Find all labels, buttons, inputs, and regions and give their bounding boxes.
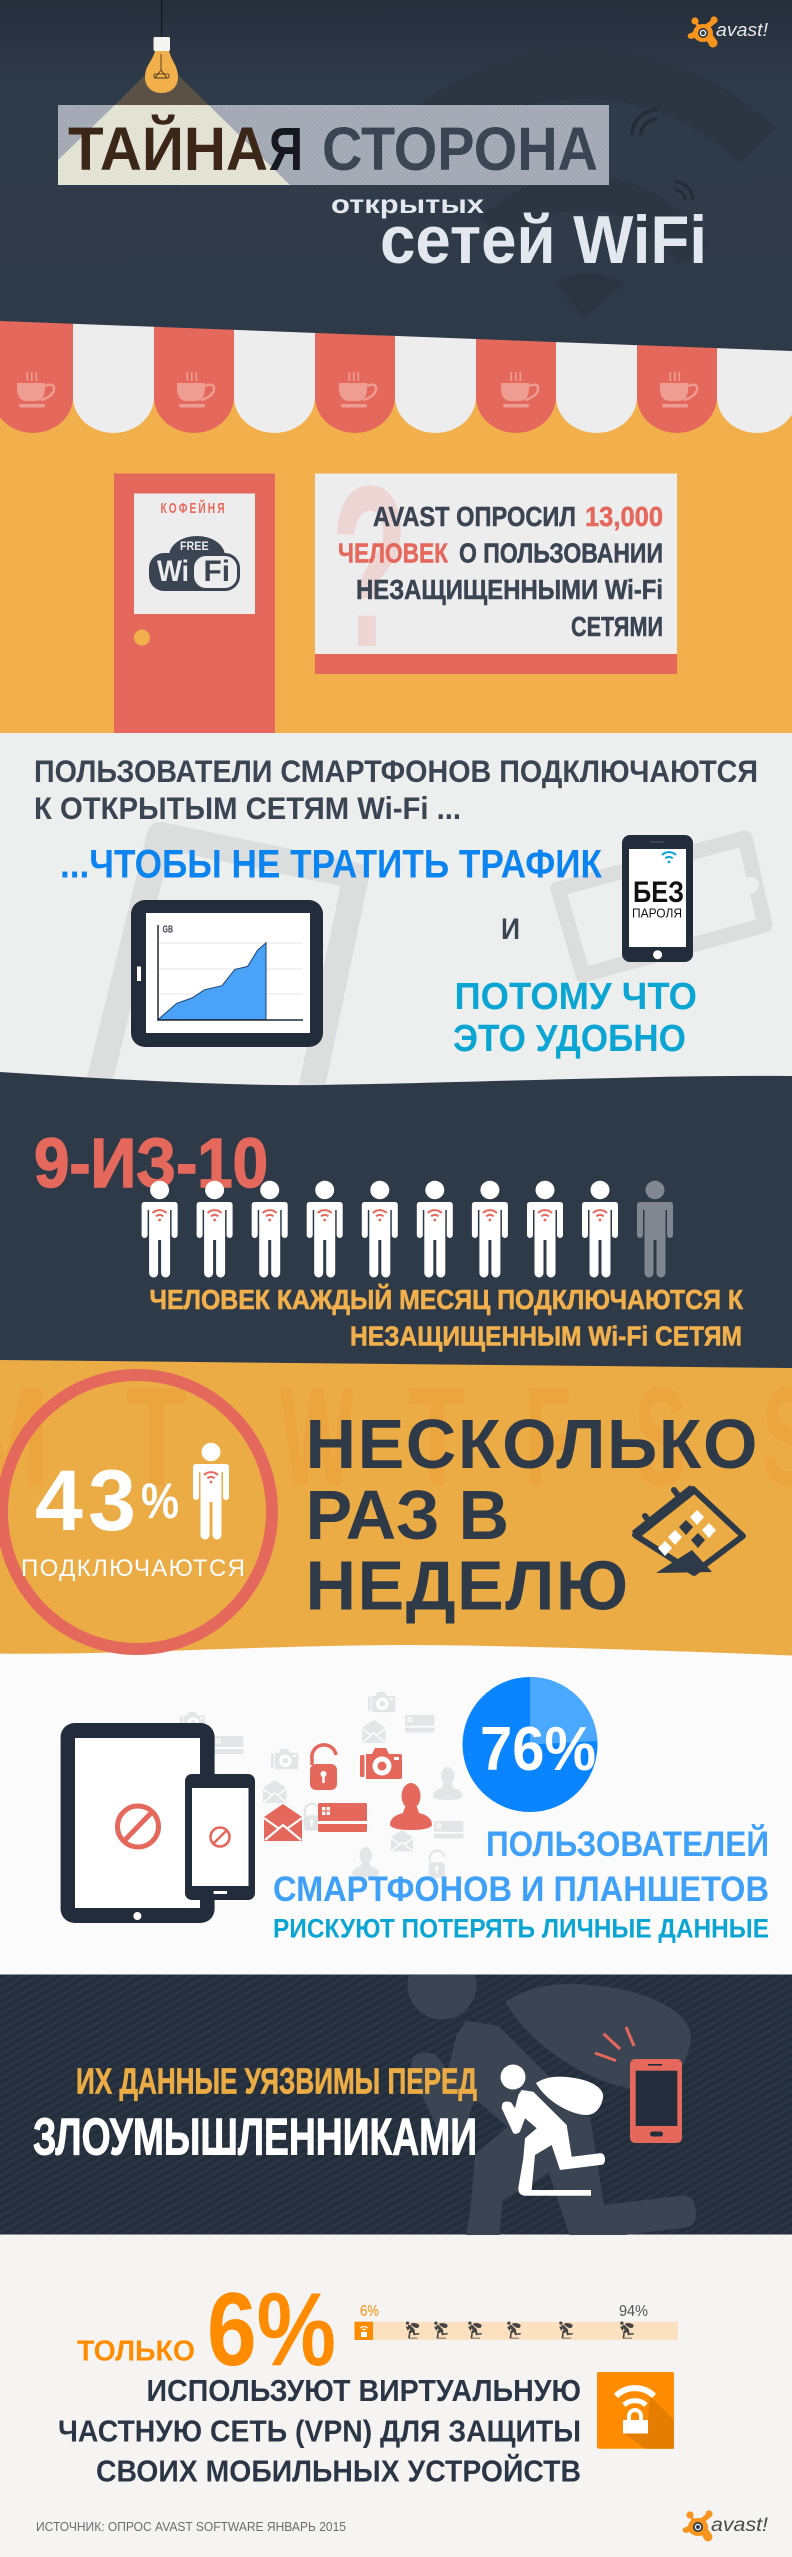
text: users at risk (273, 1824, 769, 1944)
icon: phone no password: ПАРОЛЯ (632, 906, 682, 920)
panel: bottom white section (0, 1630, 792, 1980)
text: users at risk: ПОЛЬЗОВАТЕЛЕЙ (486, 1824, 769, 1864)
pictogram: ten people (142, 1181, 673, 1277)
text: vulnerable to attackers: ИХ ДАННЫЕ УЯЗВИМЫ ПЕРЕД (76, 2061, 477, 2102)
text: monthly connection (150, 1283, 744, 1352)
stat circle: 43 percent: 43 (35, 1453, 136, 1549)
heading: several times a week (306, 1405, 758, 1625)
heading: smartphone users (34, 753, 758, 826)
awning with coffee cups (0, 300, 792, 433)
logo: avast top (688, 16, 768, 48)
text: and: И (501, 913, 520, 946)
stat circle: 43 percent: ПОДКЛЮЧАЮТСЯ (21, 1555, 245, 1582)
stat circle: 43 percent: % (141, 1473, 179, 1529)
faded weekday letters: T (409, 1358, 465, 1515)
icon: free wifi: Fi (204, 555, 230, 588)
chart: 6 vs 94 percent bar: 94% (619, 2303, 648, 2320)
panel: survey statement: СЕТЯМИ (571, 611, 663, 642)
panel: coffee shop orange wall (0, 300, 792, 733)
logo: avast bottom: avast! (711, 2515, 769, 2536)
heading: several times a week: РАЗ В (306, 1476, 509, 1554)
text: VPN usage: ИСПОЛЬЗУЮТ ВИРТУАЛЬНУЮ (146, 2374, 581, 2408)
icon: phone with blocked sign (185, 1774, 255, 1900)
faded weekday letters: T (126, 1358, 187, 1515)
source note: ИСТОЧНИК: ОПРОС AVAST SOFTWARE ЯНВАРЬ 2015 (36, 2519, 346, 2534)
icon: stolen phone (595, 2027, 682, 2143)
icon: faded thief silhouette (408, 1975, 696, 2235)
heading: smartphone users: К ОТКРЫТЫМ СЕТЯМ Wi-Fi ... (34, 790, 461, 826)
faded device outlines (96, 835, 765, 1095)
heading: several times a week: НЕДЕЛЮ (306, 1547, 628, 1625)
icon: faded wifi background (409, 74, 757, 318)
panel: header background (0, 0, 792, 351)
icon: free wifi: Wi (157, 555, 189, 588)
title: Я (269, 115, 303, 183)
panel: survey statement (315, 438, 677, 695)
stat: only 6 percent: 6% (207, 2272, 336, 2388)
chart: 76 percent pie: 76% (480, 1715, 596, 1784)
panel: survey statement: 13,000 (585, 501, 663, 532)
icon: person (193, 1443, 229, 1539)
text: monthly connection: НЕЗАЩИЩЕННЫМ Wi-Fi СЕТЯМ (350, 1320, 742, 1352)
faded weekday letters: W (280, 1358, 354, 1515)
text: VPN usage: СВОИХ МОБИЛЬНЫХ УСТРОЙСТВ (96, 2453, 581, 2489)
icon: tablet with blocked sign (61, 1723, 215, 1923)
chart: 6 vs 94 percent bar: 6% (360, 2303, 379, 2320)
title: СТОРОНА (322, 115, 598, 183)
title (58, 105, 609, 185)
panel: survey statement: ЧЕЛОВЕК (338, 538, 449, 568)
icon: phone no password (622, 835, 693, 962)
text: vulnerable to attackers: ЗЛОУМЫШЛЕННИКАМИ (33, 2109, 477, 2167)
text: VPN usage (58, 2374, 581, 2489)
icon: VPN app tile (597, 2372, 674, 2449)
text: convenient: ПОТОМУ ЧТО (454, 976, 697, 1018)
panel: survey statement: НЕЗАЩИЩЕННЫМИ Wi-Fi (356, 574, 663, 605)
subtitle: сетей WiFi (380, 202, 707, 278)
icon: hanging light bulb (115, 0, 209, 105)
chart: 6 vs 94 percent bar (354, 2303, 678, 2340)
text: VPN usage: ЧАСТНУЮ СЕТЬ (VPN) ДЛЯ ЗАЩИТЫ (58, 2415, 581, 2449)
faded weekday letters: S (634, 1358, 687, 1515)
stat: only 6 percent: ТОЛЬКО (77, 2336, 195, 2368)
text: users at risk: СМАРТФОНОВ И ПЛАНШЕТОВ (273, 1870, 769, 1909)
text: convenient: ЭТО УДОБНО (453, 1018, 686, 1060)
panel: weekly orange section (0, 1360, 792, 1656)
stat: only 6 percent (77, 2272, 336, 2388)
icons: personal data at risk (264, 1745, 432, 1841)
faded weekday letters (0, 1358, 792, 1515)
door with coffee shop sign: КОФЕЙНЯ (160, 499, 227, 516)
text: convenient (453, 976, 697, 1060)
logo: avast bottom (683, 2510, 769, 2542)
panel: survey statement: ? (331, 438, 408, 695)
panel: hackers dark section (0, 1974, 792, 2234)
icon: tablet with data chart: GB (162, 925, 173, 936)
icon: free wifi: FREE (180, 539, 209, 553)
icon: phone no password: БЕЗ (633, 876, 684, 909)
stat: 9 of 10: 9-ИЗ-10 (34, 1124, 268, 1202)
panel: 9 of 10 dark section (0, 1072, 792, 1375)
text: save traffic: ...ЧТОБЫ НЕ ТРАТИТЬ ТРАФИК (60, 842, 603, 886)
logo: avast top: avast! (716, 20, 768, 40)
heading: several times a week: НЕСКОЛЬКО (306, 1405, 758, 1483)
subtitle: открытых (331, 189, 485, 219)
icon: calendar (635, 1489, 743, 1573)
door with coffee shop sign (114, 474, 275, 733)
faded data icons (174, 1692, 463, 1878)
stat circle: 43 percent (2, 1375, 272, 1649)
icon: tablet with data chart (131, 900, 323, 1047)
panel: survey statement: AVAST ОПРОСИЛ (373, 501, 576, 532)
text: vulnerable to attackers (33, 2061, 477, 2167)
chart: 76 percent pie (462, 1677, 598, 1812)
panel: reasons section background (0, 733, 792, 1093)
title: ТАЙНА (68, 114, 268, 183)
icon: running thief (500, 2064, 605, 2196)
faded weekday letters: F (525, 1358, 571, 1515)
panel: survey statement: О ПОЛЬЗОВАНИИ (459, 538, 663, 568)
icon: free wifi (149, 536, 240, 591)
